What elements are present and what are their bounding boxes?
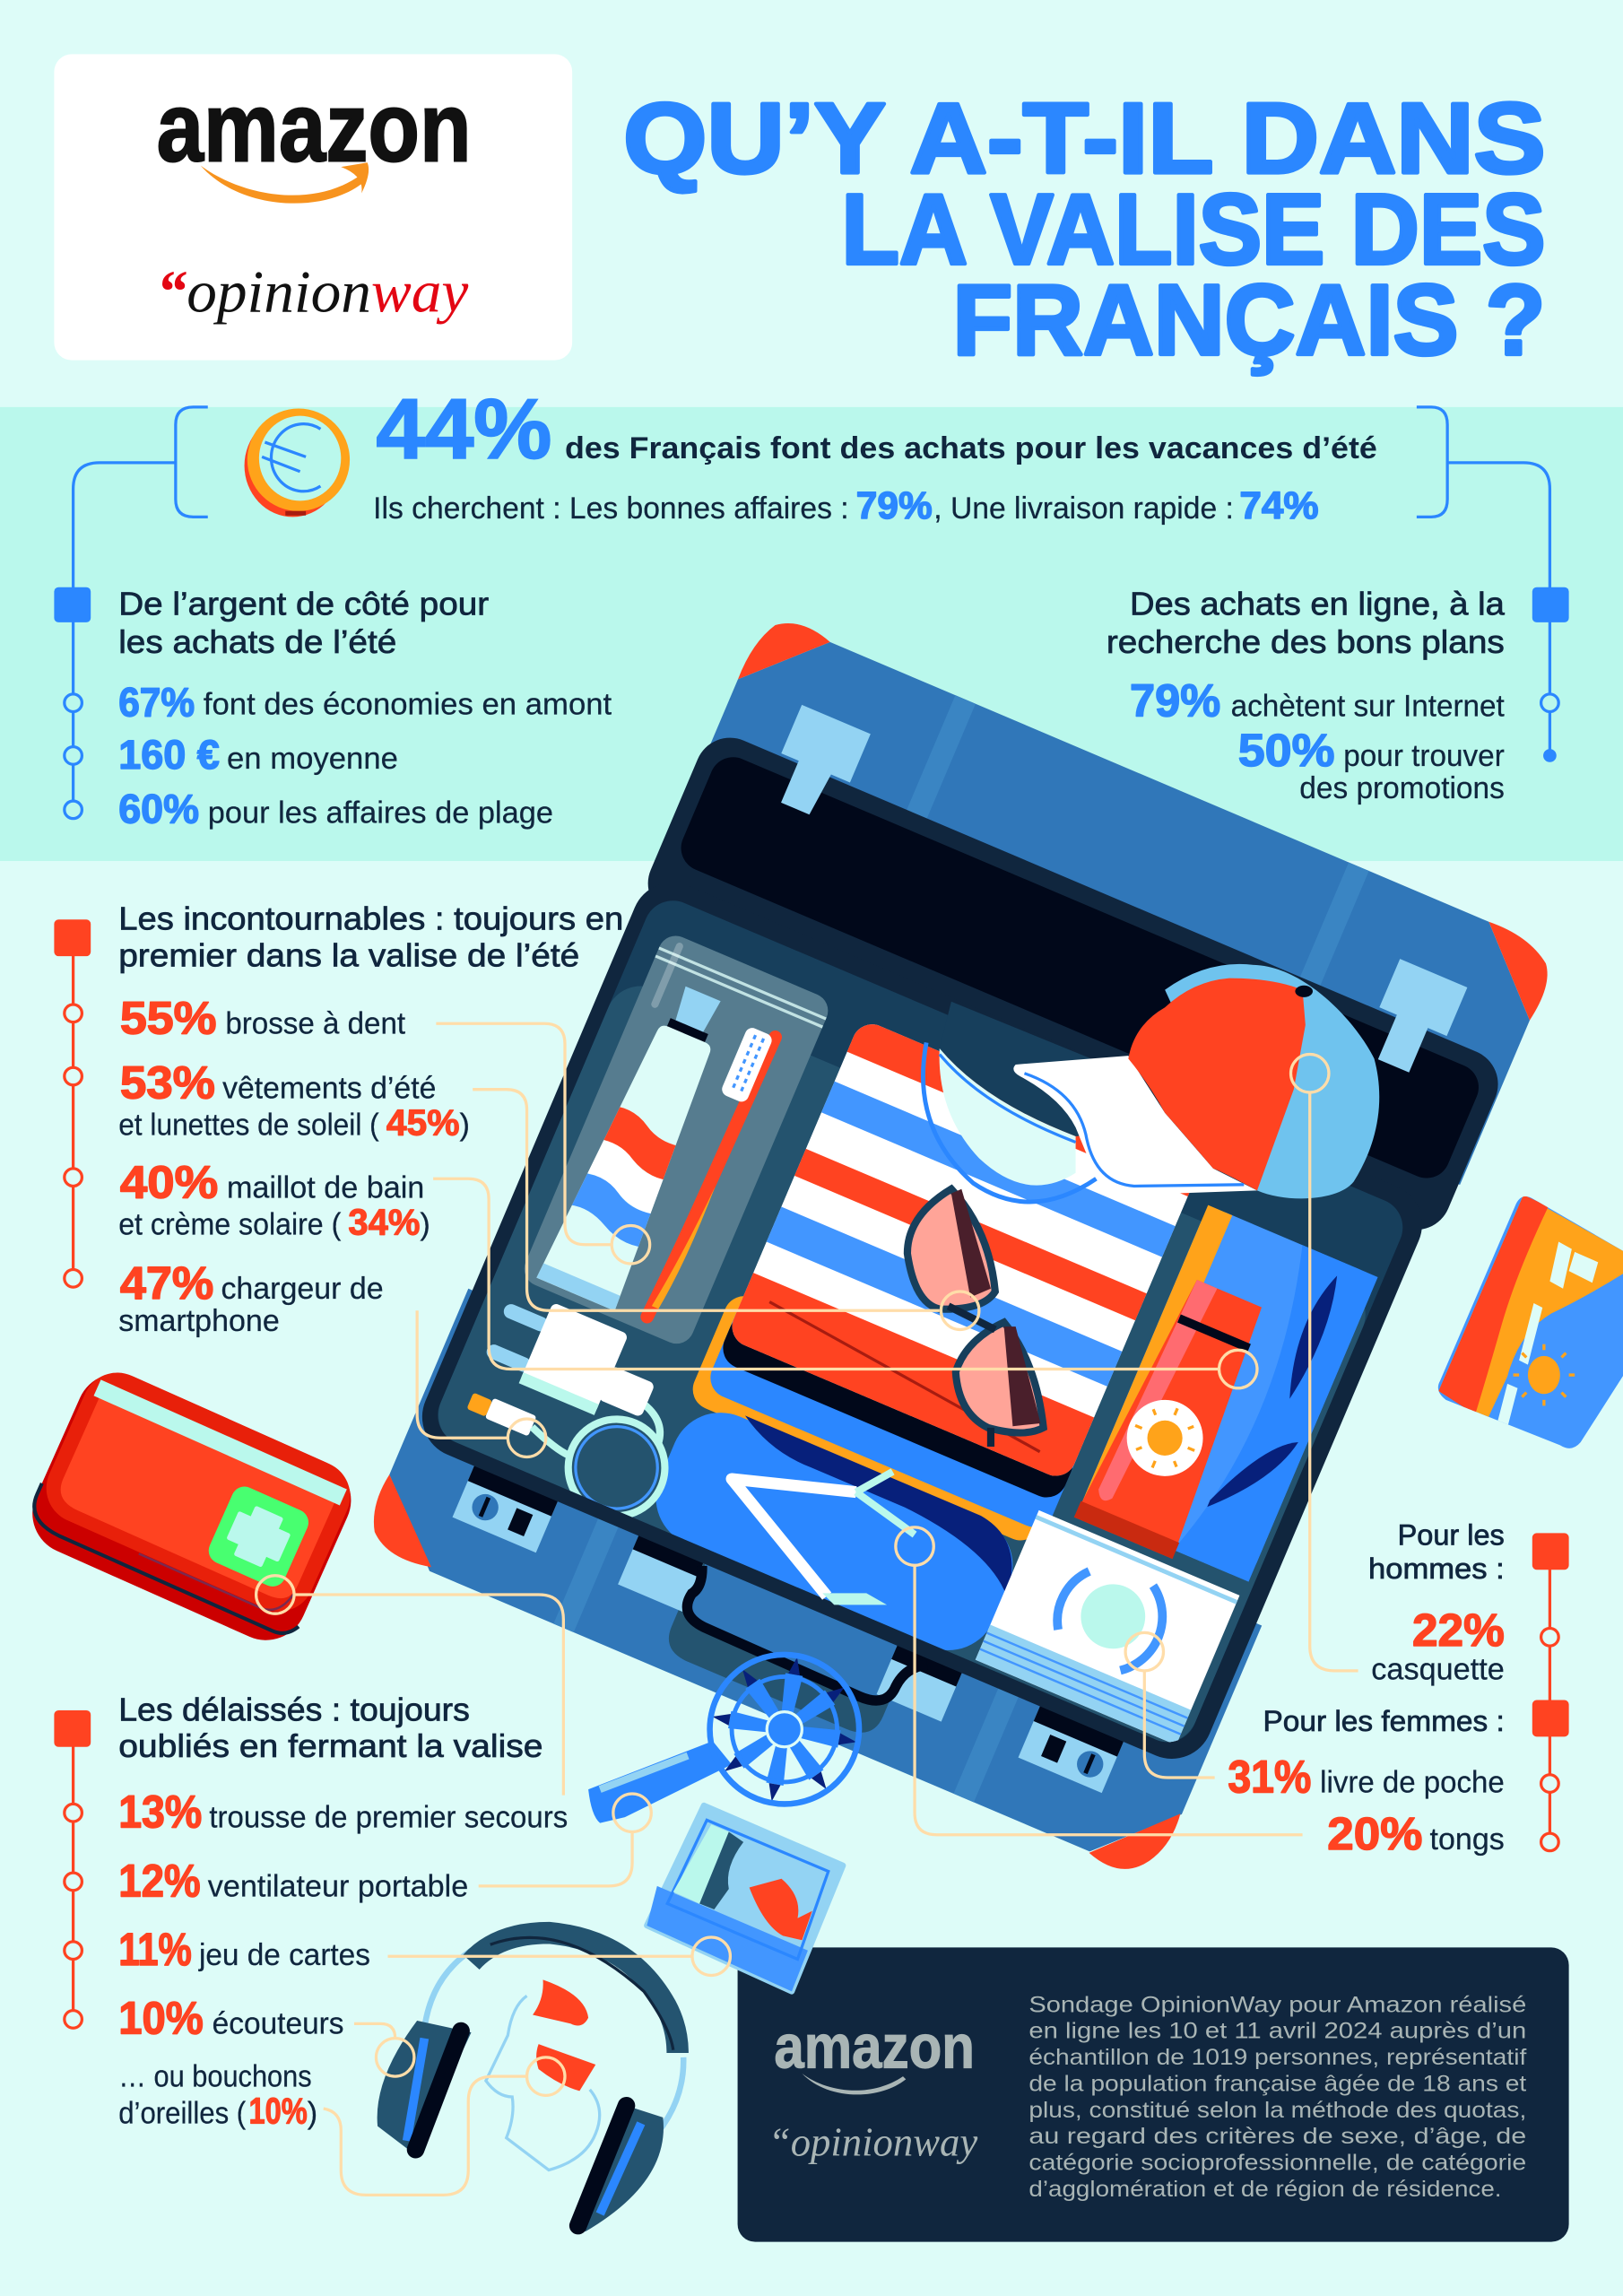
sunscreen tube xyxy=(1074,1272,1277,1559)
timeline markers xyxy=(54,587,91,819)
toiletry pouch xyxy=(519,930,833,1349)
collar and neck opening xyxy=(923,1002,1156,1202)
panel: savings: 67% xyxy=(118,679,195,725)
stat: 44 percent shoppers: 79% xyxy=(856,484,933,526)
panel: forgotten items: 11% xyxy=(118,1924,192,1975)
panel: forgotten items: jeu de cartes xyxy=(198,1938,370,1972)
panel: men and women xyxy=(1228,1518,1569,1859)
methodology text: d’agglomération et de région de résidence. xyxy=(1028,2177,1502,2202)
stat: 44 percent shoppers: , Une livraison rapide : xyxy=(933,491,1234,526)
panel: forgotten items: oubliés en fermant la valise xyxy=(118,1727,543,1764)
opinionway logo grey: “opinionway xyxy=(768,2118,978,2164)
baseball cap xyxy=(1013,964,1379,1198)
panel: must-haves: premier dans la valise de l’été xyxy=(118,937,579,974)
panel: forgotten items: ) xyxy=(308,2096,317,2130)
panel: must-haves: maillot de bain xyxy=(227,1171,424,1205)
flip-flop xyxy=(656,1413,1013,1650)
methodology text xyxy=(1028,1992,1527,2202)
panel: men and women: tongs xyxy=(1430,1822,1505,1857)
stat: 44 percent shoppers: des Français font des achats pour les vacances d’été xyxy=(565,431,1377,465)
portable fan xyxy=(588,1655,859,1823)
panel: must-haves: 53% xyxy=(120,1057,215,1108)
band: summer budget section xyxy=(0,407,1623,861)
panel: forgotten items: 13% xyxy=(118,1787,202,1838)
stat: 44 percent shoppers: 74% xyxy=(1239,484,1319,526)
methodology text: au regard des critères de sexe, d’âge, de xyxy=(1028,2124,1526,2149)
headphones xyxy=(378,1933,683,2231)
credit card xyxy=(1438,1196,1623,1448)
panel: savings: pour les affaires de plage xyxy=(208,796,553,831)
panel: must-haves: 55% xyxy=(120,993,217,1044)
panel: must-haves: chargeur de xyxy=(221,1272,384,1306)
methodology text: Sondage OpinionWay pour Amazon réalisé xyxy=(1028,1992,1526,2017)
panel: must-haves xyxy=(54,900,623,1338)
connector lines xyxy=(256,1023,1358,2195)
panel: online shopping: 79% xyxy=(1130,674,1220,726)
panel: survey note xyxy=(738,1947,1569,2242)
panel: online shopping xyxy=(1107,586,1569,805)
stat: 44 percent shoppers: 44% xyxy=(376,382,551,477)
panel: savings: 60% xyxy=(118,787,199,832)
panel: forgotten items: 12% xyxy=(118,1855,201,1906)
panel: men and women: Pour les xyxy=(1398,1518,1505,1551)
methodology text: en ligne les 10 et 11 avril 2024 auprès d’un xyxy=(1028,2019,1526,2044)
phone charger xyxy=(467,1304,669,1518)
flip-flop straps xyxy=(732,1472,915,1605)
methodology text: échantillon de 1019 personnes, représentatif xyxy=(1028,2045,1527,2070)
panel: savings xyxy=(54,586,612,832)
title: LA VALISE DES xyxy=(841,174,1545,285)
panel: must-haves: ) xyxy=(420,1207,430,1241)
panel: forgotten items: d’oreilles ( xyxy=(118,2096,247,2130)
panel: must-haves: 40% xyxy=(120,1157,218,1208)
panel: savings: les achats de l’été xyxy=(118,623,396,660)
red timeline xyxy=(54,1710,91,2028)
methodology text: catégorie socioprofessionnelle, de catégorie xyxy=(1028,2151,1526,2176)
panel: forgotten items: 10% xyxy=(248,2090,308,2131)
panel: men and women: livre de poche xyxy=(1320,1765,1505,1799)
methodology text: de la population française âgée de 18 ans et xyxy=(1028,2071,1526,2096)
red timeline xyxy=(54,919,91,1287)
panel: online shopping: recherche des bons plans xyxy=(1107,623,1505,660)
panel: men and women: casquette xyxy=(1371,1653,1505,1687)
sunglasses xyxy=(907,1189,1044,1447)
earplugs xyxy=(486,1979,600,2170)
title xyxy=(623,83,1545,376)
panel: forgotten items: Les délaissés : toujours xyxy=(118,1691,470,1727)
panel: savings: font des économies en amont xyxy=(204,688,612,722)
panel: men and women: 31% xyxy=(1228,1751,1311,1802)
amazon logo grey: amazon xyxy=(774,2012,975,2081)
logo card xyxy=(54,54,572,361)
panel: must-haves: brosse à dent xyxy=(225,1007,406,1041)
panel: savings: 160 € xyxy=(118,732,220,778)
opinionway logo: “opinionway xyxy=(157,259,469,326)
garment under layers xyxy=(687,1290,1085,1550)
title: FRANÇAIS ? xyxy=(952,265,1545,376)
panel: must-haves: ) xyxy=(459,1108,470,1142)
methodology text: plus, constitué selon la méthode des quotas, xyxy=(1028,2098,1526,2123)
panel: must-haves: vêtements d’été xyxy=(222,1071,436,1105)
toothpaste tube xyxy=(536,987,721,1309)
panel: forgotten items xyxy=(54,1691,568,2131)
panel: must-haves: et crème solaire ( xyxy=(118,1207,342,1241)
right side blue clothing xyxy=(1079,1205,1378,1582)
panel: online shopping: 50% xyxy=(1238,725,1334,776)
panel: forgotten items: trousse de premier secours xyxy=(209,1801,568,1835)
panel: online shopping: achètent sur Internet xyxy=(1231,689,1505,723)
panel: savings: De l’argent de côté pour xyxy=(118,586,489,622)
suitcase xyxy=(357,605,1563,1889)
panel: online shopping: des promotions xyxy=(1299,771,1505,805)
panel: must-haves: 34% xyxy=(348,1201,420,1242)
panel: men and women: hommes : xyxy=(1368,1552,1505,1585)
panel: forgotten items: 10% xyxy=(118,1993,204,2044)
panel: forgotten items: écouteurs xyxy=(213,2007,344,2041)
base shell xyxy=(357,867,1440,1884)
panel: online shopping: Des achats en ligne, à la xyxy=(1130,586,1505,622)
title: QU’Y A-T-IL DANS xyxy=(623,83,1545,195)
striped garment xyxy=(725,1018,1202,1483)
paperback book xyxy=(976,1510,1239,1745)
panel: men and women: Pour les femmes : xyxy=(1263,1704,1505,1737)
stat: 44 percent shoppers: Ils cherchent : Les bonnes affaires : xyxy=(373,491,849,526)
panel: must-haves: et lunettes de soleil ( xyxy=(118,1108,379,1142)
panel: must-haves: 47% xyxy=(120,1257,213,1309)
panel: must-haves: smartphone xyxy=(118,1304,280,1338)
panel: men and women: 22% xyxy=(1412,1605,1505,1656)
stat: 44 percent shoppers xyxy=(373,382,1377,526)
bracket connectors xyxy=(74,407,1549,810)
playing cards box xyxy=(647,1805,843,1991)
panel: forgotten items: ventilateur portable xyxy=(208,1869,468,1903)
red timeline xyxy=(1532,1533,1569,1851)
panel: savings: en moyenne xyxy=(227,742,398,776)
panel: must-haves: Les incontournables : toujours en xyxy=(118,900,623,937)
icon: euro coin xyxy=(245,409,350,517)
panel: forgotten items: … ou bouchons xyxy=(118,2060,312,2094)
toothbrush xyxy=(629,1026,779,1322)
lid xyxy=(637,608,1563,1242)
first aid kit xyxy=(20,1361,364,1653)
amazon logo: amazon xyxy=(157,74,472,183)
panel: must-haves: 45% xyxy=(386,1101,459,1143)
panel: men and women: 20% xyxy=(1327,1808,1422,1859)
panel: online shopping: pour trouver xyxy=(1343,739,1505,773)
timeline markers xyxy=(1532,587,1569,762)
